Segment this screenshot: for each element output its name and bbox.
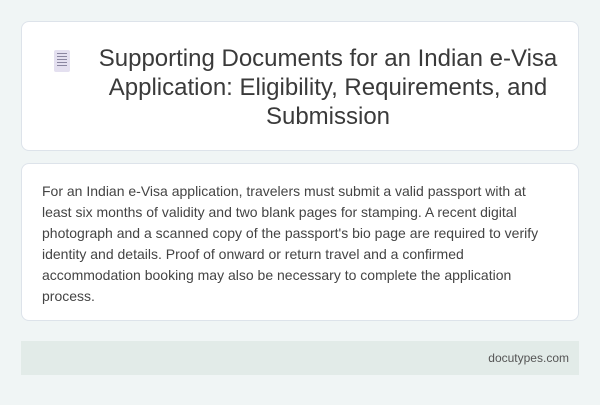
panel: description [21,163,579,321]
title: Supporting Documents for an Indian e-Visa Application: Eligibility, Requirements, and Submission [99,45,557,130]
footer text: docutypes.com [488,351,569,365]
icon: document [54,50,70,72]
panel: title card [21,21,579,151]
footer [21,341,579,375]
text block: For an Indian e-Visa application, travelers must submit a valid passport with at least six months of validity and two blank pages for stamping. A recent digital photograph and a scanned copy of the passport's bio page are required to verify identity and details. Proof of onward or return travel and a confirmed accommodation booking may also be necessary to complete the application process. [42,183,538,304]
